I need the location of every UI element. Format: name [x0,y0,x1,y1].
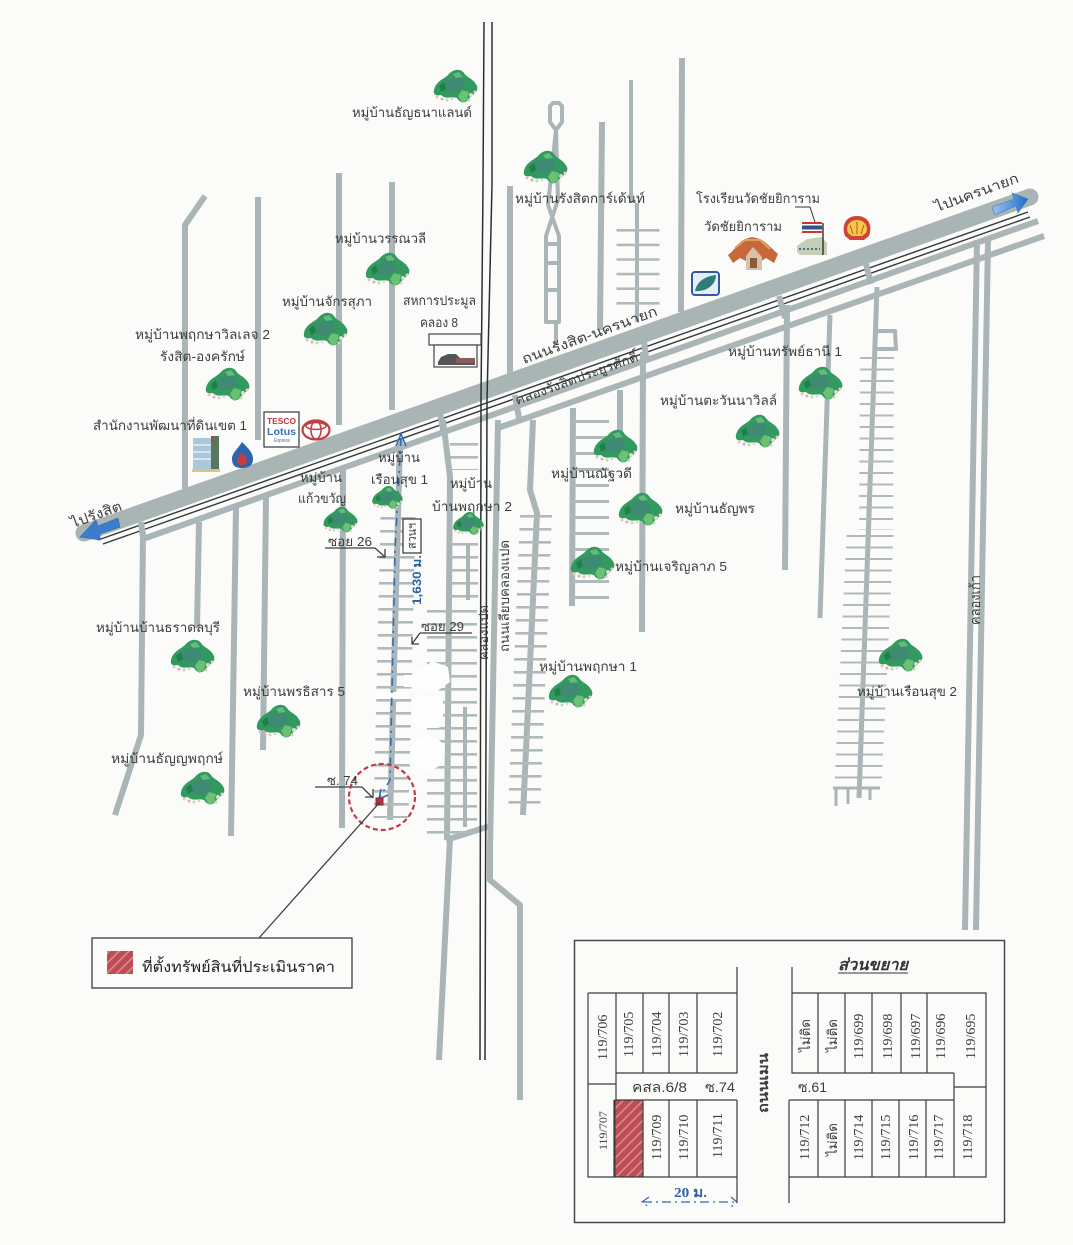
plot numbers: 119/704 [650,1012,665,1057]
label: Suan sign box: สวนฯ [405,523,419,549]
labels: place names: หมู่บ้าน [300,470,342,486]
plot numbers: 119/718 [961,1115,976,1160]
plot numbers: 119/716 [907,1115,922,1160]
plot numbers: 119/707 [596,1111,610,1150]
plot lines [588,967,986,1203]
plot numbers: 119/703 [677,1012,692,1057]
plot numbers: ไม่ติด [825,1019,840,1053]
lane verticals [465,331,896,827]
labels: place names: หมู่บ้านจักรสุภา [282,294,372,310]
ladder side lanes [391,229,877,836]
icon: school with Thai flag [795,207,827,255]
icon: Tesco Lotus: Lotus [267,427,296,438]
side street with loop and ladder [546,80,637,345]
icon: temple [728,237,778,270]
labels: rotated road names: คลองเก้า [967,575,983,625]
labels: place names: เรือนสุข 1 [371,472,428,488]
labels: place names: หมู่บ้านธัญญพฤกษ์ [111,751,223,767]
marker: property location circle [349,764,415,830]
street labels: ซ.74 [705,1079,735,1095]
labels: place names: หมู่บ้านพรธิสาร 5 [243,684,345,700]
icon: land office building [192,436,220,472]
labels: place names: หมู่บ้านวรรณวลี [335,231,426,247]
plot numbers: 119/706 [596,1015,611,1060]
plot numbers: 119/699 [852,1014,867,1059]
icon: Toyota [302,420,330,440]
label: distance 1,630 m: 1,630 ม. [410,555,424,605]
side streets north of the highway [185,58,682,490]
callout: soi 26 arrow [325,548,385,557]
labels: rotated road names: ถนนรังสิต-นครนายก [520,303,659,367]
icon: Tesco Lotus: TESCO [267,417,296,426]
plot numbers: 119/697 [909,1014,924,1059]
icon: Tesco Lotus [264,412,299,447]
plot: subject lot [615,1100,643,1177]
plot numbers [596,1012,979,1160]
legend: property location: ที่ตั้งทรัพย์สินที่ประเมินราคา [142,956,335,976]
icon: Tesco Lotus: Express [274,438,290,444]
street labels: ซ.61 [798,1079,827,1095]
callout: soi 29 arrow [412,633,472,644]
labels: rotated road names [68,170,1021,660]
labels: place names: หมู่บ้าน [450,476,492,492]
highway: Rangsit-Nakhon Nayok road band [84,197,1030,533]
labels: rotated road names: คลองแปด [476,605,491,660]
map: road network [84,22,1044,1100]
labels: place names: หมู่บ้านเจริญลาภ 5 [615,559,727,575]
icon: auction building [429,334,481,367]
panel: enlarged plot plan [574,940,1004,1222]
plot numbers: 119/714 [852,1115,867,1160]
leader line to legend [259,802,380,938]
labels: place names: หมู่บ้านเรือนสุข 2 [857,684,957,700]
labels: rotated road names: ไปรังสิต [68,498,124,531]
labels: place names: หมู่บ้านธัญธนาแลนด์ [352,105,472,121]
marker: property square [376,798,383,805]
labels: place names: สำนักงานพัฒนาที่ดินเขต 1 [93,417,247,433]
labels: place names: หมู่บ้านพฤกษา 1 [539,659,637,675]
plot numbers: 119/712 [798,1115,813,1160]
icon: Shell [844,216,870,240]
canal: Rangsit Prayoon Sak double line [98,212,1030,544]
arrow: to Rangsit [80,518,120,540]
railway: Khlong Paet double line [480,22,492,1060]
plot numbers: 119/715 [879,1115,894,1160]
dimension: 20 m [642,1186,737,1207]
callout: sub-soi 74 arrow [315,787,373,798]
plot numbers: 119/705 [622,1012,637,1057]
plot numbers: ไม่ติด [825,1123,840,1157]
plot numbers: 119/711 [711,1113,726,1158]
labels: place names: ซอย 26 [328,534,372,549]
plot numbers: 119/717 [932,1115,947,1160]
labels: place names [93,105,957,788]
plot numbers: ไม่ติด [798,1019,813,1053]
labels: rotated road names: ถนนเลียบคลองแปด [497,540,512,652]
side streets south of the highway [115,240,988,1100]
labels: place names: หมู่บ้าน [378,450,420,466]
arrow: to Nakhon Nayok [992,193,1028,215]
labels: rotated road names: ไปนครนายก [931,170,1021,215]
plot numbers: 119/710 [677,1115,692,1160]
side roads along the canal [143,221,1044,539]
labels: place names: คลอง 8 [420,315,458,330]
route: blue dashed route to the property [379,434,406,799]
plot numbers: 119/702 [711,1012,726,1057]
plot numbers: 119/698 [881,1014,896,1059]
labels: place names: รังสิต-องครักษ์ [160,349,245,364]
street labels: ถนนเมน [755,1052,771,1113]
labels: place names: หมู่บ้านพฤกษาวิลเลจ 2 [135,327,270,343]
street labels [632,1052,827,1113]
plot numbers: 119/696 [934,1014,949,1059]
labels: place names: บ้านพฤกษา 2 [432,499,512,514]
legend: property location [92,938,352,988]
labels: place names: สหการประมูล [403,293,476,309]
label: Suan sign box [403,519,421,553]
labels: place names: หมู่บ้านณัฐวดี [551,466,632,482]
dimension: 20 m: 20 ม. [674,1186,707,1201]
plot numbers: 119/709 [650,1115,665,1160]
labels: place names: หมู่บ้านธัญพร [675,501,755,517]
masked areas [376,661,450,770]
icon: PTT flame [232,442,253,468]
labels: place names: วัดชัยยิการาม [704,219,782,234]
labels: place names: หมู่บ้านตะวันนาวิลล์ [660,393,777,409]
labels: place names: โรงเรียนวัดชัยยิการาม [696,191,820,206]
labels: rotated road names: คลองรังสิตประยูรศักดิ์ [512,347,642,409]
street labels: คสล.6/8 [632,1079,687,1095]
trees: housing estates [171,70,922,805]
heading: enlarged section: ส่วนขยาย [838,957,910,974]
labels: place names: หมู่บ้านทรัพย์ธานี 1 [728,344,842,360]
canal crossings [141,264,871,538]
labels: place names: หมู่บ้านรังสิตการ์เด้นท์ [515,191,645,207]
labels: place names: ซอย 29 [421,619,464,634]
labels: place names: ซ. 74 [327,773,358,788]
labels: place names: แก้วขวัญ [298,491,346,506]
labels: place names: หมู่บ้านบ้านธราดลบุรี [96,620,220,636]
icon: Bangchak logo [692,272,719,295]
plot numbers: 119/695 [964,1014,979,1059]
